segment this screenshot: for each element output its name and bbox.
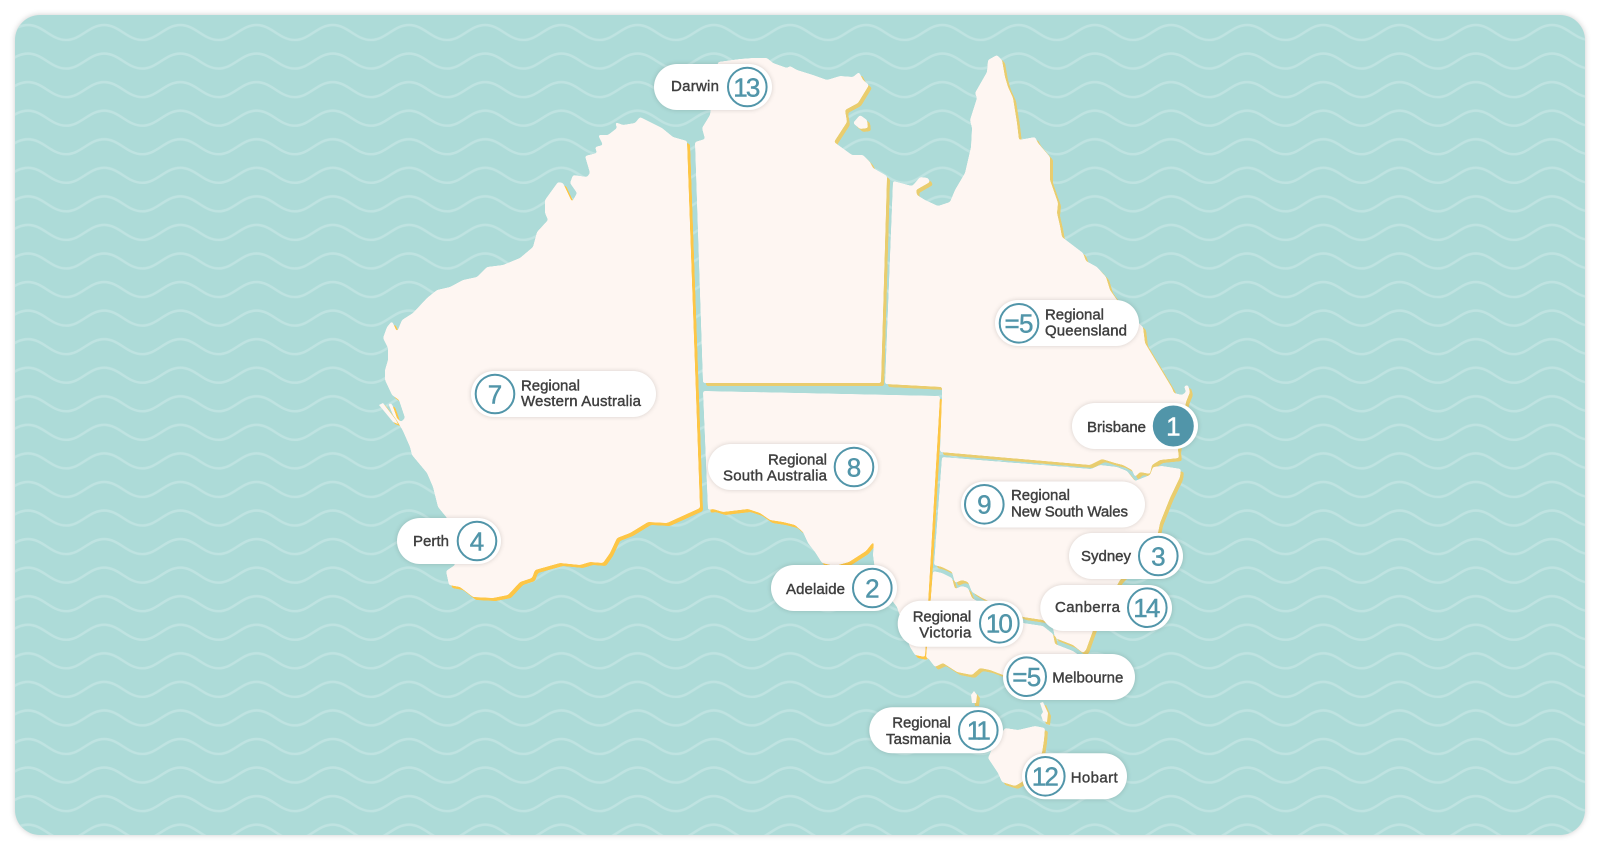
callout: Adelaide rank 2: [771, 565, 897, 611]
callout: Regional Queensland rank =5: [995, 300, 1139, 346]
callout: Regional Western Australia rank 7: [471, 371, 656, 417]
callout: Regional Victoria rank 10: [898, 601, 1023, 647]
callout: Regional New South Wales rank 9: [961, 482, 1145, 528]
callout: Brisbane rank 1: 1: [1166, 411, 1181, 441]
land: New South Wales: [934, 457, 1184, 656]
callout: Regional Victoria rank 10: 10: [986, 609, 1013, 639]
callout: Regional South Australia rank 8: 8: [847, 452, 861, 482]
callout: Hobart rank 12: Hobart: [1071, 769, 1119, 786]
callout: Melbourne rank =5: =5: [1012, 662, 1041, 692]
land: Tasmania and islands: [971, 691, 1051, 789]
callout: Melbourne rank =5: [1003, 654, 1135, 700]
callout: Sydney rank 3: 3: [1151, 541, 1166, 571]
callout: Regional Western Australia rank 7: 7: [488, 379, 502, 409]
callout: Perth rank 4: Perth: [413, 533, 449, 550]
land: Victoria: [926, 571, 1086, 683]
callout: Sydney rank 3: [1069, 533, 1183, 579]
land: South Australia: [703, 391, 942, 660]
map of Australia: [379, 55, 1193, 789]
callout: Darwin rank 13: Darwin: [671, 78, 719, 95]
callout: Melbourne rank =5: Melbourne: [1052, 669, 1123, 686]
callout: Adelaide rank 2: Adelaide: [786, 581, 845, 598]
callout: Regional New South Wales rank 9: 9: [977, 490, 992, 520]
land: Northern Territory: [695, 58, 890, 386]
callout: Regional Queensland rank =5: Regional: [1045, 306, 1104, 323]
callout: Canberra rank 14: [1040, 585, 1172, 631]
callout: Regional Tasmania rank 11: Regional: [892, 715, 951, 732]
callout: Brisbane rank 1: [1072, 403, 1198, 449]
callout: Sydney rank 3: Sydney: [1081, 548, 1132, 565]
callout: Regional Queensland rank =5: =5: [1004, 309, 1034, 339]
callout: Regional Tasmania rank 11: Tasmania: [886, 731, 952, 748]
callout: Regional South Australia rank 8: [708, 444, 878, 490]
callout: Regional Western Australia rank 7: Western Australia: [521, 393, 642, 410]
callout: Regional Tasmania rank 11: 11: [967, 716, 991, 746]
callout: Regional New South Wales rank 9: Regional: [1011, 487, 1070, 504]
land: Western Australia: [379, 117, 703, 601]
callout: Brisbane rank 1: Brisbane: [1087, 419, 1146, 436]
callout: Canberra rank 14: Canberra: [1055, 599, 1121, 616]
callout: Regional Victoria rank 10: Regional: [913, 609, 971, 626]
callout: Regional South Australia rank 8: Regional: [768, 452, 827, 468]
callout: Perth rank 4: [397, 518, 501, 564]
callout: Regional Western Australia rank 7: Regional: [521, 378, 580, 394]
callout: Regional New South Wales rank 9: New South Wales: [1011, 504, 1128, 521]
callout: Regional South Australia rank 8: South Australia: [723, 468, 828, 484]
callout: Adelaide rank 2: 2: [865, 573, 880, 603]
callout: Regional Queensland rank =5: Queensland: [1045, 323, 1127, 340]
callout: Hobart rank 12: 12: [1032, 762, 1059, 792]
callout: Regional Victoria rank 10: Victoria: [919, 624, 972, 641]
callout: Regional Tasmania rank 11: [869, 707, 1003, 753]
callout: Hobart rank 12: [1022, 753, 1127, 799]
callout: Canberra rank 14: 14: [1133, 593, 1160, 623]
land: Queensland: [885, 55, 1193, 480]
callout: Darwin rank 13: 13: [733, 72, 760, 102]
callout: Perth rank 4: 4: [470, 526, 484, 556]
callout: Darwin rank 13: [654, 64, 772, 110]
